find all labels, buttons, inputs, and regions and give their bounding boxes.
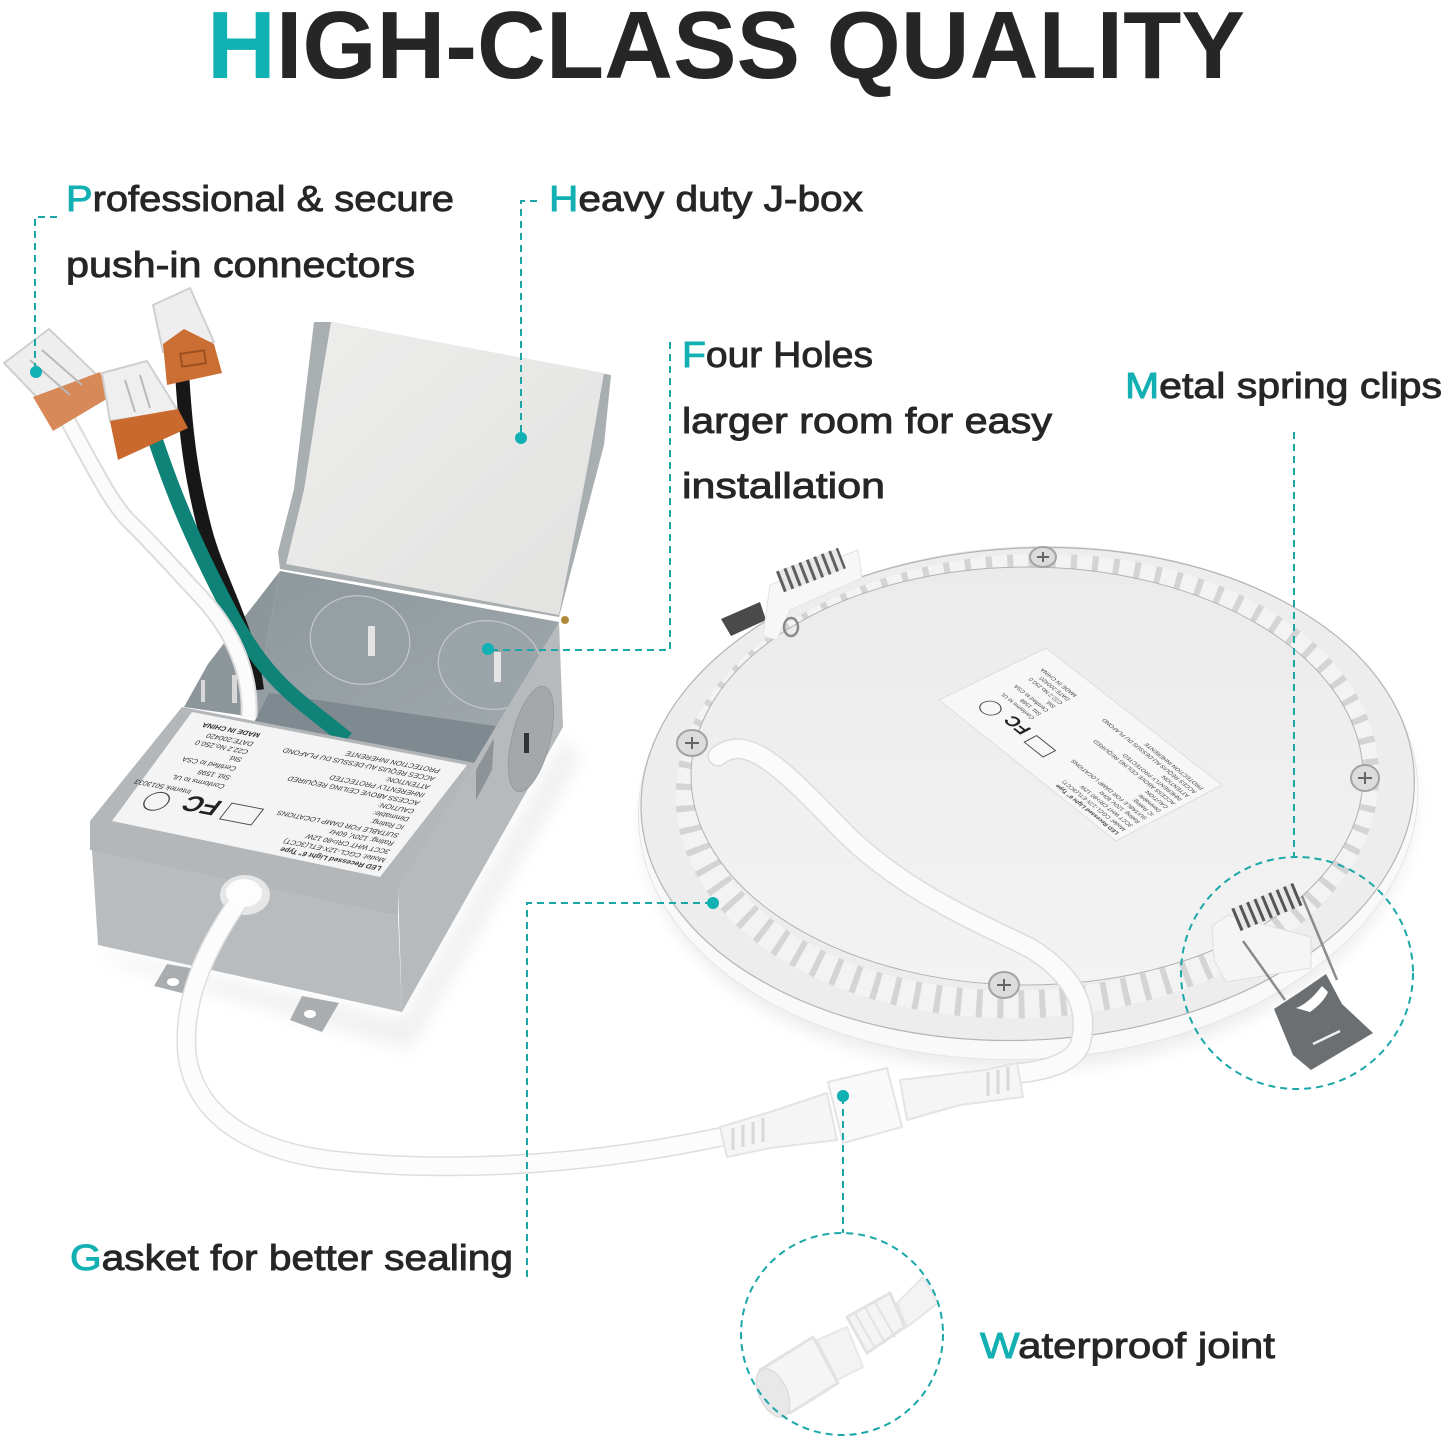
box rating label: SUITABLE FOR DAMP LOCATIONS (275, 809, 401, 839)
callout line: spring clips (1293, 432, 1295, 857)
box rating label: MADE IN CHINA (199, 721, 262, 739)
box rating label: C22.2 No.250.0 (193, 739, 251, 756)
box rating label: CAUTION: (376, 801, 417, 815)
box rating label: Certified to CSA (179, 755, 239, 773)
panel rating label: LED Recessed Light 6" Type (1054, 783, 1121, 835)
panel rating label (939, 648, 1222, 841)
box rating label: Conforms to UL (169, 773, 227, 790)
box rating label: LED Recessed Light 6" Type (278, 846, 384, 872)
panel disc back (691, 567, 1363, 985)
recessed LED panel light (625, 527, 1432, 1089)
inset: spring clip circle (1181, 857, 1413, 1089)
box rating label: Dimmable: (371, 809, 412, 823)
panel rating label: Rating: 120V, 60Hz (1098, 790, 1142, 824)
label: push-in connectors (66, 178, 454, 285)
box rating label: Model: CGCL-12X-ETL(3CCT) (280, 837, 388, 864)
connector: middle (102, 361, 188, 460)
waterproof connector on cable (720, 1063, 1023, 1157)
panel rim (625, 527, 1432, 1089)
panel rating label: MADE IN CHINA (1039, 667, 1079, 697)
panel rating label: Conforms to UL (999, 691, 1037, 720)
callout line: four holes (482, 342, 670, 655)
label: four holes: Four Holes (682, 334, 873, 375)
label: waterproof joint: Waterproof joint (980, 1325, 1275, 1366)
open lid (278, 322, 611, 624)
panel rating label: Std. 1598 (1019, 698, 1044, 716)
label: spring clips: Metal spring clips (1125, 365, 1442, 406)
panel rating label: Certified to CSA (1013, 683, 1051, 712)
screws (677, 547, 1379, 998)
callout line: J-box (515, 201, 537, 444)
inset: waterproof joint (741, 1233, 943, 1435)
panel rating label: ACCESS ABOVE CEILING REQUIRED (1092, 739, 1178, 805)
bottom spring clip (1212, 894, 1373, 1070)
panel rating label: DATE:200420 (1039, 676, 1072, 701)
panel rating label: C22.2 No.250.0 (1028, 677, 1065, 705)
box rating label: FC (175, 790, 228, 821)
panel rating label: FC (999, 713, 1036, 737)
connector: top (153, 288, 222, 385)
label: push-in connectors: push-in connectors (66, 244, 415, 285)
top spring clip (721, 550, 862, 640)
label: four holes (682, 334, 1052, 506)
wires (62, 372, 347, 739)
box top face (90, 707, 475, 916)
box rating label: 3CCT WHT CRI>80 12W (303, 832, 392, 856)
box front face (92, 850, 402, 1012)
box rating label: ATTENTION: (383, 775, 432, 791)
box rating label: INHERENTLY PROTECTED (327, 773, 427, 799)
label: four holes: larger room for easy (682, 400, 1052, 441)
panel rating label: ACCES REQUIS AU-DESSUS DU PLAFOND (1101, 717, 1199, 794)
box rating label: Rating: 120V, 60Hz (327, 828, 396, 847)
panel rating label: Model: CGCL-12X-ETL(3CCT) (1061, 779, 1128, 831)
label: four holes: installation (682, 465, 885, 506)
box rating label: ACCESS ABOVE CEILING REQUIRED (285, 774, 422, 807)
panel rating label: Dimmable: (1136, 792, 1163, 813)
mounting tabs (154, 964, 339, 1032)
label: J-box: Heavy duty J-box (549, 178, 863, 219)
inset circle outline (741, 1233, 943, 1435)
box shadow (98, 735, 580, 1050)
connector: lower left (4, 329, 110, 431)
label: gasket: Gasket for better sealing (70, 1237, 513, 1278)
callout line: gasket (527, 897, 719, 1277)
panel rating label: PROTECTION INHERENTE (1143, 742, 1206, 790)
box rating label: ACCES REQUIS AU-DESSUS DU PLAFOND (280, 746, 437, 783)
panel rating label: ATTENTION: (1160, 773, 1192, 798)
panel rating label: INHERENTLY PROTECTED (1122, 753, 1185, 801)
panel rating label: SUITABLE FOR DAMP LOCATIONS (1070, 758, 1149, 820)
box rating label (105, 712, 467, 877)
cord grommet (220, 875, 270, 915)
box rating label: PROTECTION INHERENTE (343, 749, 443, 775)
junction box (62, 322, 611, 1050)
box rating label: Intertek 5013033 (132, 778, 194, 796)
box interior (184, 571, 559, 770)
label: push-in connectors: Professional & secure (66, 178, 454, 219)
callout line: connectors (30, 217, 57, 378)
panel rating label: CAUTION: (1143, 788, 1171, 809)
panel rating label: IC Rating: (1131, 797, 1156, 816)
panel white cable (718, 749, 1083, 1074)
panel rating label: 3CCT WHT CRI>80 12W (1079, 784, 1135, 827)
box right side (398, 622, 563, 1012)
box rating label: DATE:200420 (204, 732, 256, 748)
panel rating label: Std. (1044, 699, 1058, 708)
box white cord (186, 879, 730, 1166)
box rating label: Std. 1598 (195, 768, 233, 781)
box rating label: IC Rating: (368, 818, 406, 831)
box rating label: Std. (226, 754, 244, 764)
callout line: waterproof joint (837, 1090, 849, 1233)
